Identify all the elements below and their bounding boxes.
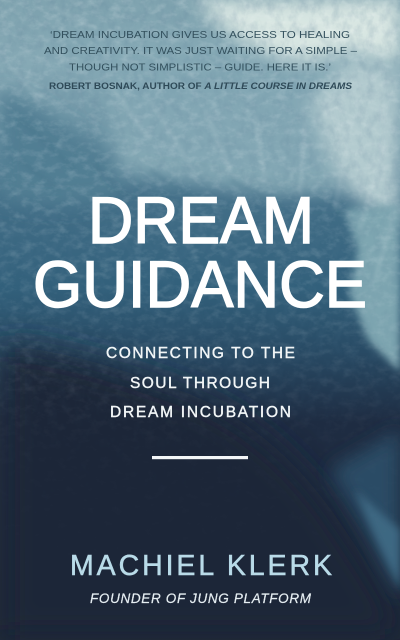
endorsement quote: ‘DREAM INCUBATION GIVES US ACCESS TO HEALING <box>50 29 350 41</box>
endorsement quote: AND CREATIVITY. IT WAS JUST WAITING FOR A SIMPLE – <box>44 45 357 57</box>
title: GUIDANCE <box>33 247 367 321</box>
endorsement quote <box>44 29 357 74</box>
subtitle <box>106 345 295 421</box>
title <box>33 183 367 321</box>
title: DREAM <box>88 183 314 257</box>
subtitle: CONNECTING TO THE <box>106 345 295 362</box>
author credential: FOUNDER OF JUNG PLATFORM <box>90 591 312 606</box>
subtitle: DREAM INCUBATION <box>110 404 291 421</box>
author name: MACHIEL KLERK <box>70 550 332 582</box>
divider rule <box>152 456 248 459</box>
endorsement quote: THOUGH NOT SIMPLISTIC – GUIDE. HERE IT IS.’ <box>69 62 331 74</box>
subtitle: SOUL THROUGH <box>130 375 270 392</box>
quote attribution: ROBERT BOSNAK, AUTHOR OF A LITTLE COURSE IN DREAMS <box>49 81 353 92</box>
